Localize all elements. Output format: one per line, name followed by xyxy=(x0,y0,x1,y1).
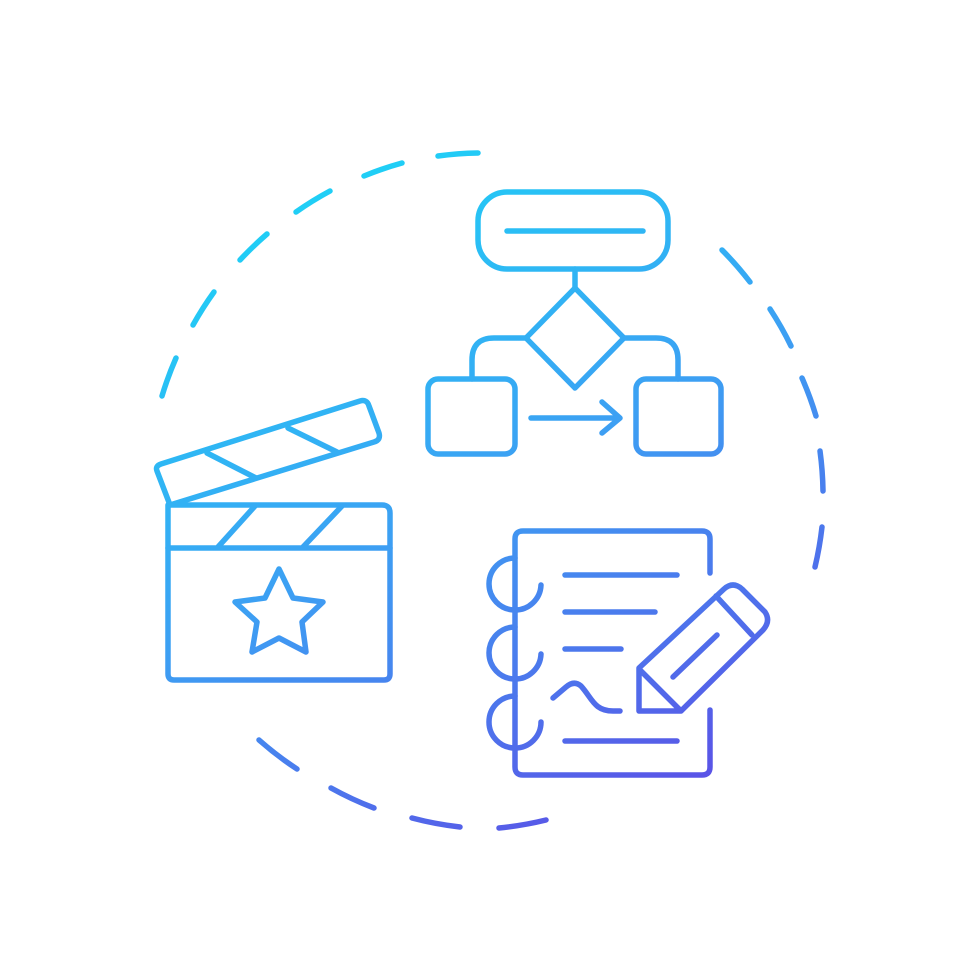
flowchart top terminator xyxy=(478,192,668,269)
notebook page outline xyxy=(515,531,710,775)
clapper arm stripes xyxy=(207,428,337,478)
clapper arm xyxy=(156,401,379,505)
dashed circle ring xyxy=(162,153,823,828)
pencil xyxy=(639,585,768,711)
clapper header band xyxy=(168,506,390,548)
clapper body xyxy=(168,505,390,680)
flowchart left box xyxy=(428,379,515,454)
flowchart branches xyxy=(472,338,678,379)
arrow between boxes xyxy=(531,402,620,433)
icon: star xyxy=(235,569,323,652)
icon: notebook with pencil xyxy=(489,531,768,775)
notebook spiral rings xyxy=(489,558,541,748)
flowchart terminator line xyxy=(507,228,643,234)
icon: flowchart xyxy=(428,192,721,454)
flowchart connector xyxy=(572,269,578,288)
notebook text lines xyxy=(565,575,677,741)
flowchart right box xyxy=(636,379,721,454)
flowchart decision diamond xyxy=(526,288,624,388)
signature squiggle xyxy=(553,683,620,711)
icon: film clapperboard xyxy=(156,401,390,680)
